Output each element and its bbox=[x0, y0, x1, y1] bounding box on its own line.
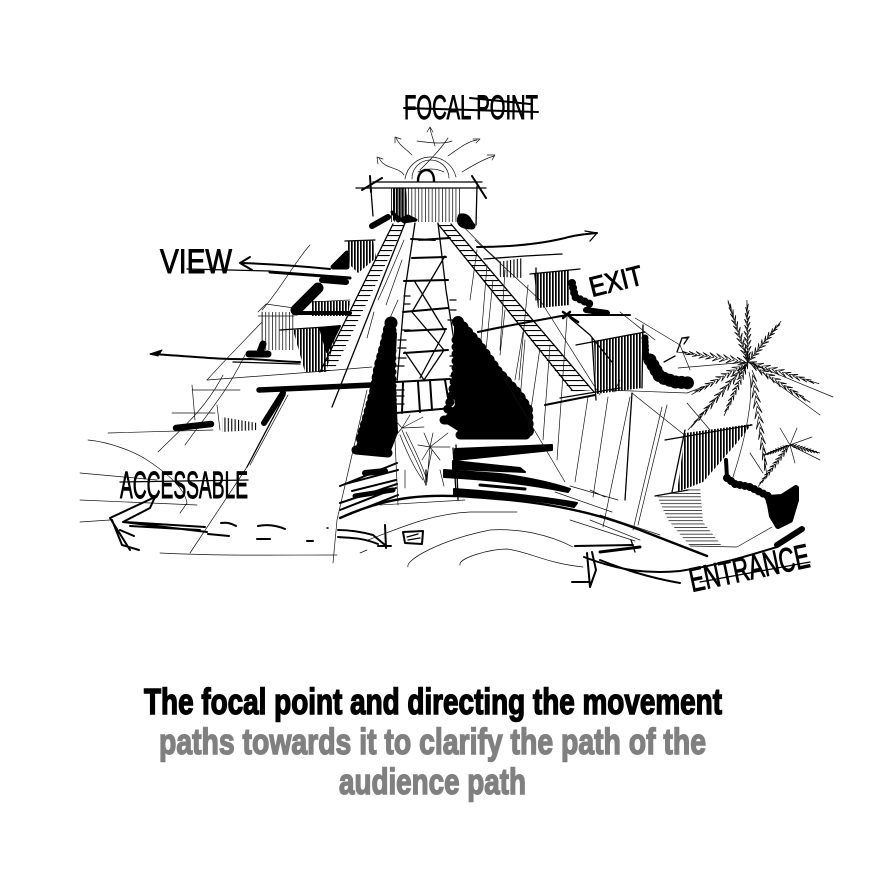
right black shadow blobs bbox=[572, 283, 796, 526]
label: focal point bbox=[404, 89, 538, 127]
palm tree, large bbox=[677, 299, 833, 478]
left upper tiers bbox=[158, 240, 376, 452]
focal point radiating arrows and arch bbox=[377, 127, 495, 181]
label: exit: EXIT bbox=[586, 260, 646, 303]
label: accessible bbox=[120, 465, 248, 507]
arrow pointing to view, upper bbox=[187, 257, 350, 278]
forecourt shadow strokes bbox=[340, 440, 707, 556]
dashed audience path bbox=[110, 497, 328, 550]
label: entrance: ENTRANCE bbox=[686, 537, 813, 600]
label: view: VIEW bbox=[160, 243, 232, 281]
label: entrance bbox=[686, 537, 813, 600]
palm tree, small right bbox=[756, 428, 821, 488]
central scaffold lattice bbox=[396, 223, 457, 413]
right lower tick and road bbox=[572, 529, 802, 587]
caption line 1: The focal point and directing the movement bbox=[144, 681, 722, 722]
left ground black bars bbox=[80, 385, 372, 563]
entrance mark: scribble and box bbox=[338, 525, 423, 553]
top temple with vertical hatching bbox=[356, 176, 486, 226]
right staircase bbox=[438, 222, 594, 392]
central small palms bbox=[392, 415, 450, 485]
arrow to upper right bbox=[664, 337, 689, 362]
caption line 3: audience path bbox=[339, 761, 526, 802]
label: accessible: ACCESSABLE bbox=[120, 465, 248, 507]
caption line 2: paths towards it to clarify the path of the bbox=[159, 721, 706, 762]
right tier hatch blocks bbox=[484, 254, 772, 547]
lower approach curves bbox=[368, 512, 583, 567]
sketch: stepped pyramid bbox=[80, 89, 833, 600]
left staircase bbox=[320, 223, 405, 407]
arrow pointing left, lower bbox=[150, 350, 300, 364]
right pyramid face verticals bbox=[470, 240, 630, 527]
label: focal point: FOCAL POINT bbox=[404, 89, 538, 127]
upper right long arrow bbox=[477, 231, 597, 247]
central black shadow masses bbox=[356, 322, 528, 453]
right perimeter lines bbox=[606, 312, 763, 530]
caption bbox=[144, 681, 722, 802]
